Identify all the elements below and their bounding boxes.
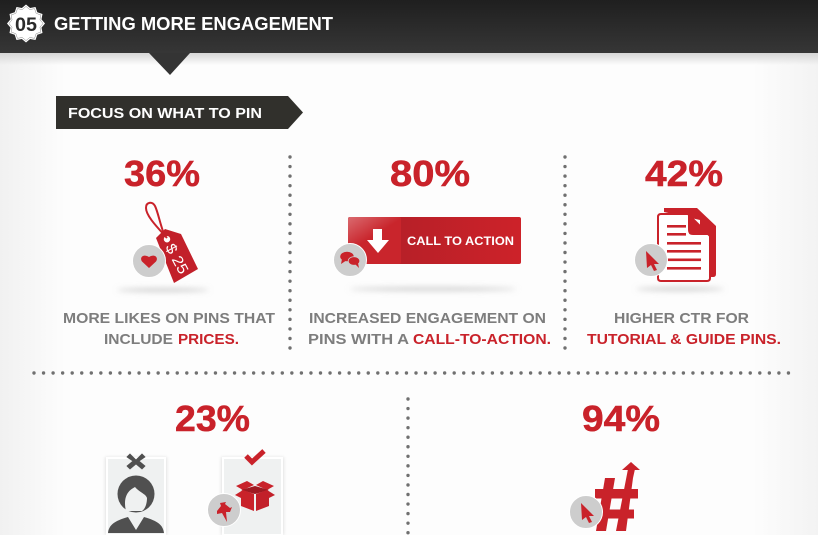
caption: PINS WITH A bbox=[308, 332, 410, 348]
value: 80% bbox=[390, 153, 470, 194]
caption bbox=[308, 311, 551, 348]
section number badge bbox=[7, 4, 45, 42]
icon: cross bbox=[127, 454, 145, 469]
title: GETTING MORE ENGAGEMENT bbox=[54, 14, 333, 34]
icon: price tag bbox=[146, 203, 198, 283]
section tag: focus on what to pin bbox=[56, 96, 303, 129]
header pointer bbox=[149, 53, 190, 75]
icon: heart badge bbox=[132, 244, 166, 278]
stat: 36% prices bbox=[63, 153, 275, 348]
shadow bbox=[349, 287, 517, 291]
stat: 80% call to action bbox=[308, 153, 551, 348]
value: 42% bbox=[645, 153, 723, 194]
caption: CALL-TO-ACTION. bbox=[413, 332, 551, 348]
shadow bbox=[636, 287, 724, 291]
stat: 42% tutorial pins bbox=[587, 153, 781, 348]
stat: 23% bbox=[105, 398, 284, 535]
icon: call to action button bbox=[348, 217, 521, 264]
icon: check mark bbox=[246, 451, 264, 462]
caption: PRICES. bbox=[178, 332, 239, 348]
caption: HIGHER CTR FOR bbox=[614, 311, 749, 327]
caption: TUTORIAL & GUIDE PINS. bbox=[587, 332, 781, 348]
caption: INCREASED ENGAGEMENT ON bbox=[309, 311, 546, 327]
icon: price tag: $ 25 bbox=[161, 241, 192, 277]
header bar bbox=[0, 0, 818, 75]
caption bbox=[587, 311, 781, 348]
card: product box bbox=[221, 457, 284, 535]
caption bbox=[63, 311, 275, 348]
caption: MORE LIKES ON PINS THAT bbox=[63, 311, 275, 327]
caption: INCLUDE bbox=[104, 332, 173, 348]
icon: documents bbox=[658, 208, 716, 281]
icon: hashtag with arrow bbox=[592, 462, 640, 531]
icon: call to action button: CALL TO ACTION bbox=[407, 234, 514, 248]
icon: cursor badge bbox=[634, 244, 668, 276]
icon: speech bubbles badge bbox=[334, 244, 366, 276]
section tag: focus on what to pin: FOCUS ON WHAT TO PIN bbox=[68, 106, 262, 122]
shadow bbox=[117, 288, 209, 292]
stat: 94% bbox=[570, 398, 660, 531]
value: 36% bbox=[124, 153, 200, 194]
card: person bbox=[105, 457, 167, 535]
icon: cursor badge bbox=[570, 496, 602, 528]
value: 94% bbox=[582, 398, 660, 439]
section number badge: 05 bbox=[15, 15, 37, 36]
value: 23% bbox=[175, 398, 250, 439]
divider dots bbox=[34, 157, 794, 535]
icon: pushpin badge bbox=[208, 494, 240, 526]
